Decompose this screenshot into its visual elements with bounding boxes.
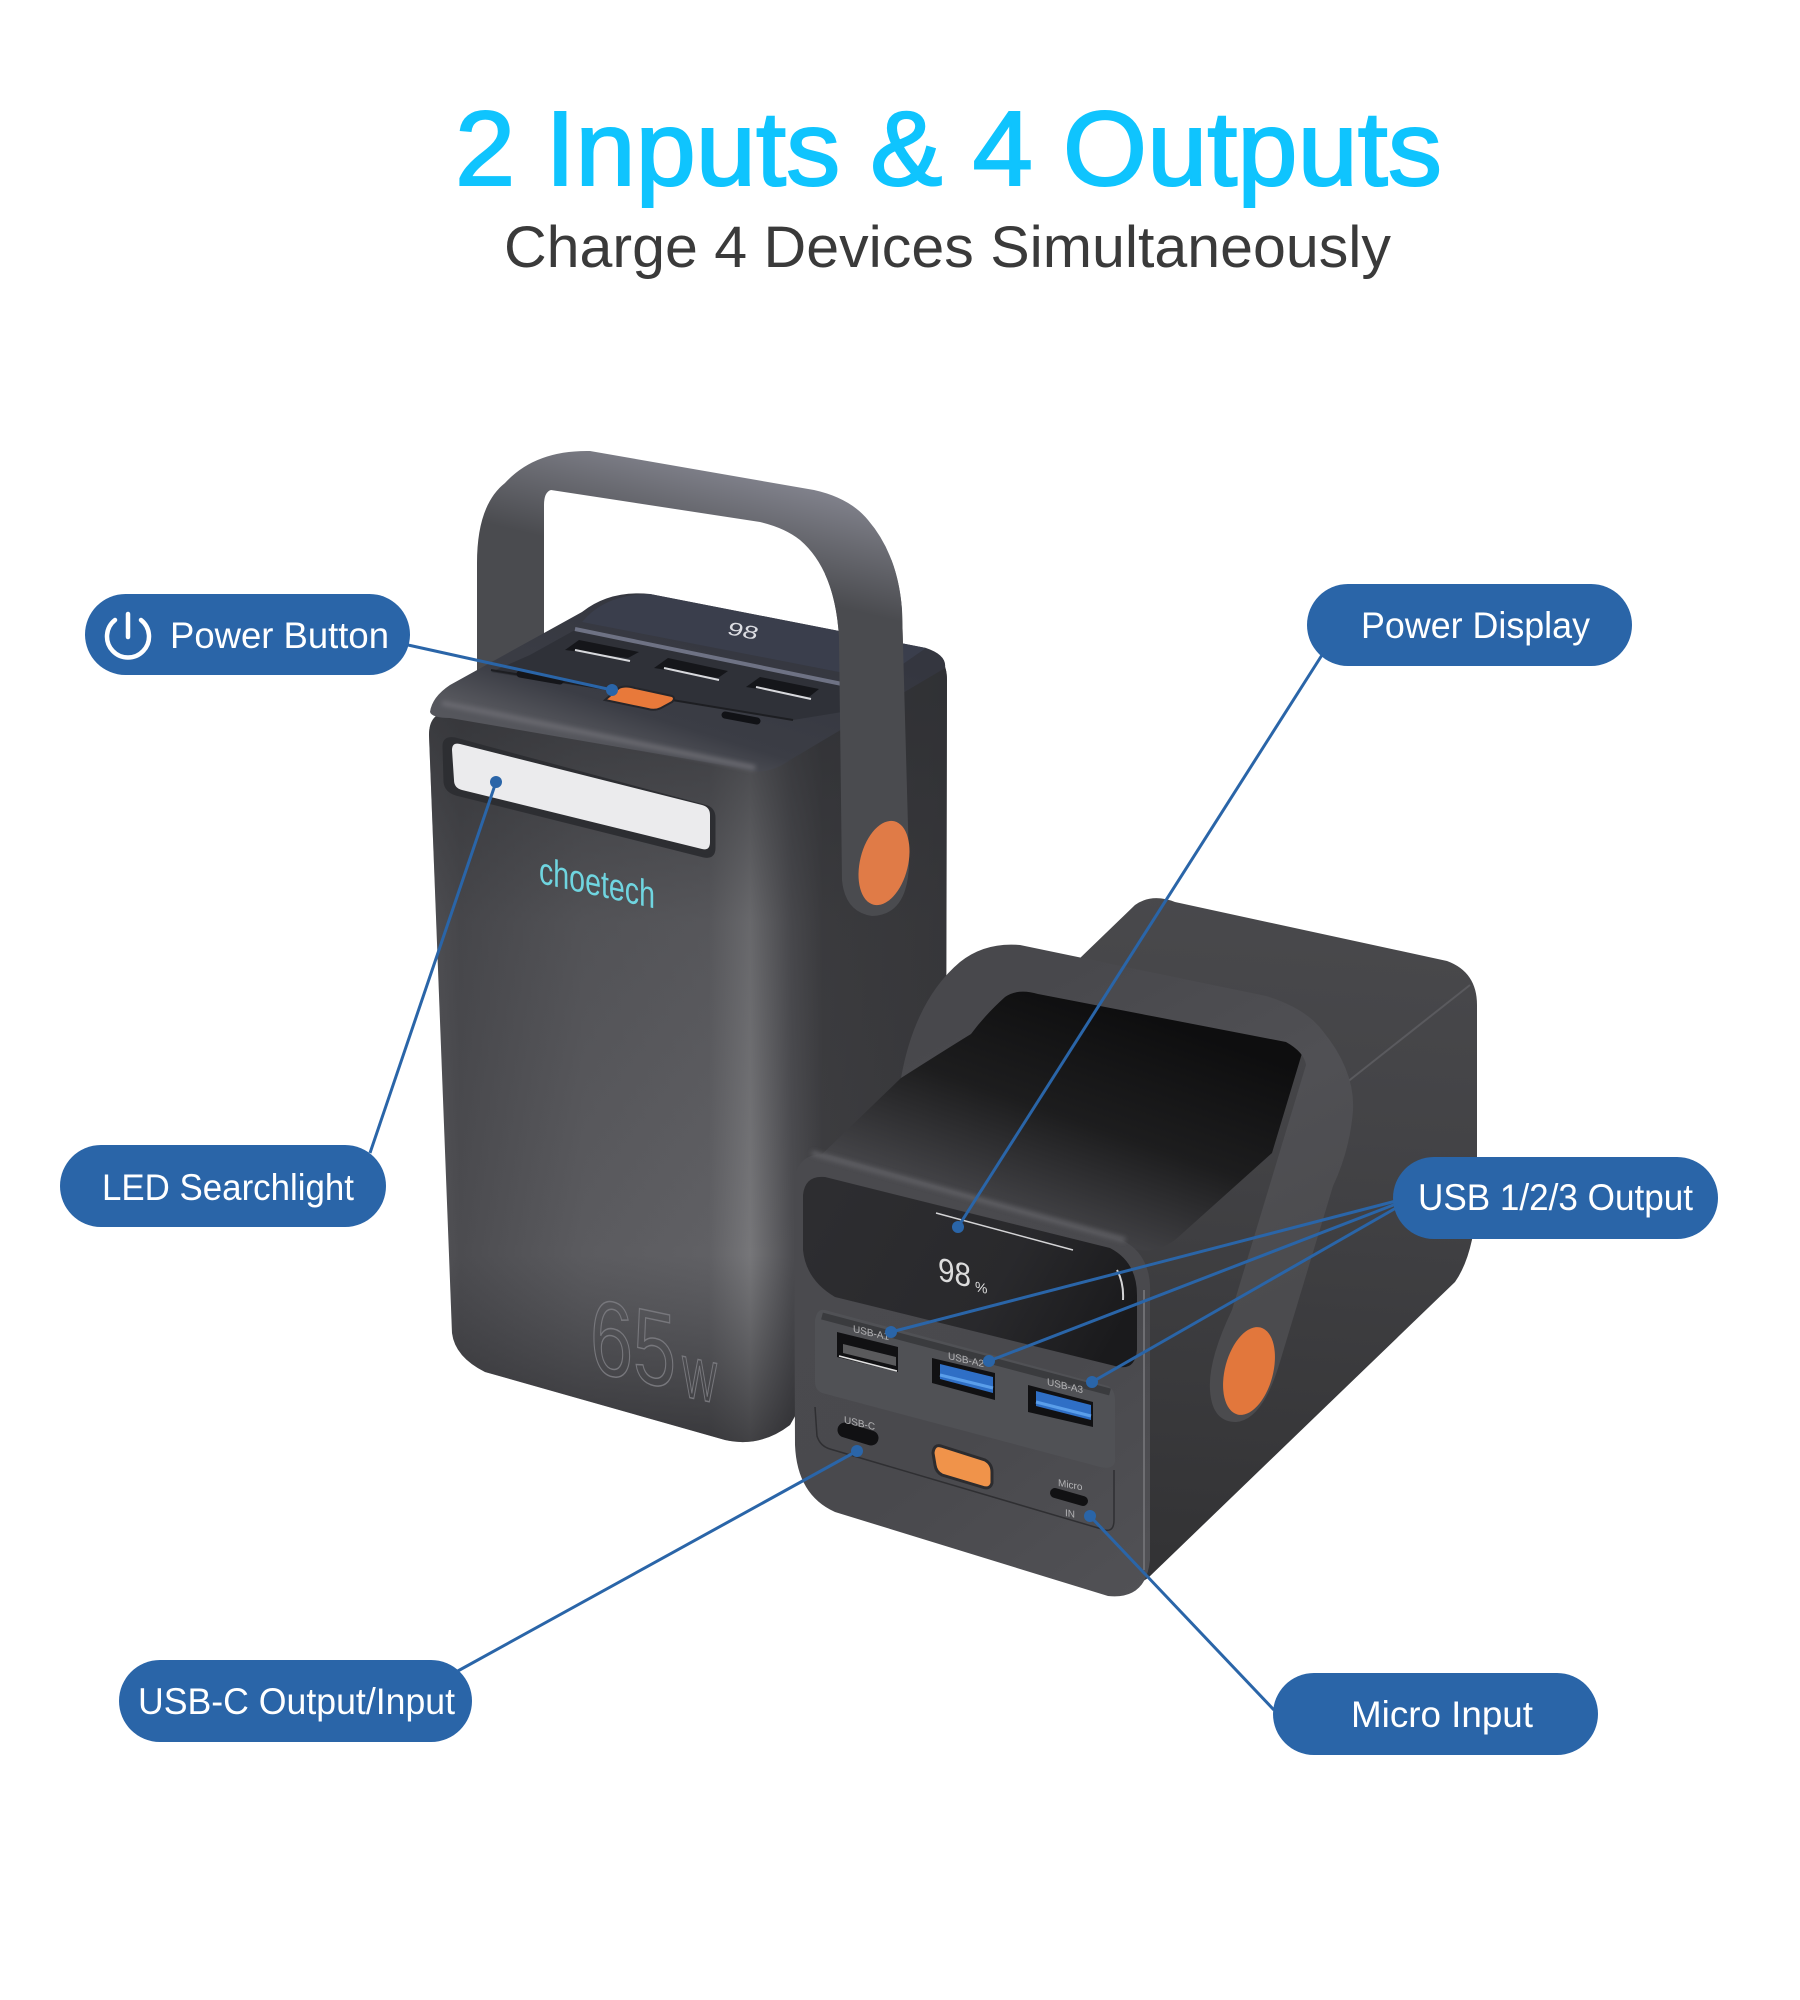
line: power button bbox=[408, 645, 618, 696]
display reading: 98 bbox=[938, 1251, 971, 1296]
front face bbox=[794, 1154, 1150, 1596]
65W outline mark: W bbox=[682, 1345, 717, 1416]
body: rear block and side face bbox=[1050, 898, 1477, 1596]
micro port bbox=[725, 715, 757, 721]
brand logo: choetech bbox=[539, 849, 655, 917]
port labels: USB-A1 bbox=[853, 1324, 889, 1343]
handle bbox=[901, 945, 1353, 1422]
product: power bank, standing view bbox=[429, 451, 947, 1442]
micro labels: Micro bbox=[1058, 1478, 1083, 1493]
body shading bbox=[429, 650, 947, 1442]
icon: power symbol bbox=[107, 614, 149, 657]
top display panel bbox=[582, 594, 926, 680]
body: front and side faces bbox=[429, 650, 947, 1442]
USB-C label: USB-C bbox=[844, 1415, 875, 1433]
line: micro input bbox=[1084, 1510, 1274, 1710]
port USB-A3 bbox=[1028, 1385, 1093, 1427]
label: USB-C Output/Input: USB-C Output/Input bbox=[138, 1681, 456, 1722]
65W outline mark: 65 bbox=[590, 1275, 676, 1412]
LED searchlight bbox=[444, 739, 714, 856]
subtitle: Charge 4 Devices Simultaneously bbox=[504, 215, 1391, 280]
product: power bank, lying view bbox=[794, 898, 1477, 1596]
label: LED Searchlight bbox=[60, 1145, 386, 1227]
display reading: 98 bbox=[724, 619, 761, 644]
lines: USB outputs bbox=[885, 1201, 1396, 1388]
port labels: USB-A3 bbox=[1047, 1377, 1083, 1396]
display: % bbox=[975, 1279, 988, 1298]
port labels bbox=[853, 1324, 1083, 1396]
port panel bbox=[491, 629, 842, 721]
side edge highlight bbox=[1346, 985, 1470, 1083]
power button bbox=[605, 686, 674, 710]
label: LED Searchlight: LED Searchlight bbox=[102, 1167, 355, 1208]
lower port panel bbox=[815, 1407, 1114, 1530]
line: power display bbox=[952, 655, 1322, 1233]
handle: carrying strap back part bbox=[477, 451, 909, 916]
label: Micro Input bbox=[1273, 1673, 1598, 1755]
display bbox=[803, 1177, 1137, 1367]
label: USB 1/2/3 Output bbox=[1393, 1157, 1718, 1239]
label: USB-C Output/Input bbox=[119, 1660, 472, 1742]
port USB-A1 bbox=[837, 1332, 898, 1372]
micro labels bbox=[1058, 1478, 1083, 1521]
port USB-A2 bbox=[932, 1358, 995, 1400]
line: LED searchlight bbox=[370, 776, 502, 1153]
strap orange stud bbox=[1214, 1321, 1284, 1421]
handle: strap front part bbox=[825, 560, 909, 916]
USB-A ports bbox=[565, 640, 819, 699]
port labels: USB-A2 bbox=[948, 1351, 984, 1370]
title: 2 Inputs & 4 Outputs bbox=[455, 90, 1442, 208]
top face bbox=[430, 593, 945, 772]
USB-A port panel bbox=[815, 1310, 1115, 1468]
micro labels: IN bbox=[1065, 1508, 1075, 1521]
micro port bbox=[1055, 1493, 1083, 1501]
label: Power Button bbox=[85, 594, 410, 675]
top front edge highlight bbox=[812, 1153, 1125, 1240]
line: USB-C bbox=[456, 1445, 863, 1672]
label: Power Display bbox=[1307, 584, 1632, 666]
USB-C port bbox=[845, 1430, 871, 1438]
callout lines bbox=[370, 645, 1396, 1710]
label: Power Display: Power Display bbox=[1361, 605, 1590, 646]
front rim highlight bbox=[1143, 1290, 1145, 1570]
label: Power Button: Power Button bbox=[170, 615, 389, 656]
top surface bbox=[817, 985, 1306, 1250]
power button bbox=[933, 1446, 992, 1488]
top edge highlight bbox=[442, 703, 755, 768]
label: Micro Input: Micro Input bbox=[1351, 1694, 1534, 1735]
strap orange stud bbox=[850, 815, 918, 911]
USB-C port bbox=[520, 674, 560, 681]
label: USB 1/2/3 Output: USB 1/2/3 Output bbox=[1418, 1177, 1694, 1218]
